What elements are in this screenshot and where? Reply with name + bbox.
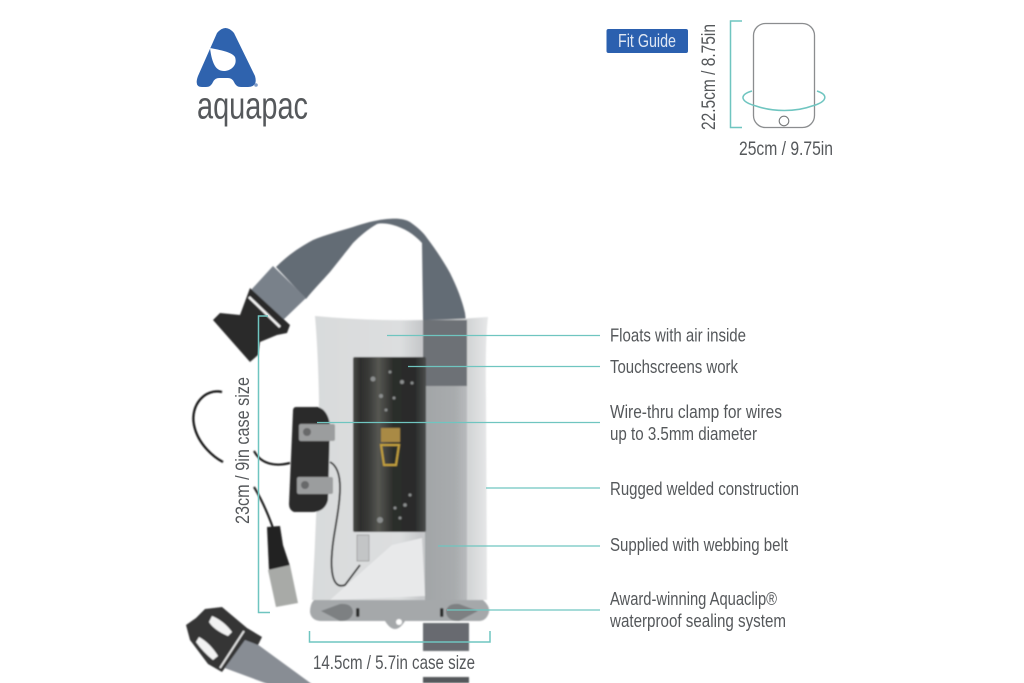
case height bracket [258,316,270,612]
icon: aquapac A mark [197,28,258,87]
device [353,357,426,532]
label: Aquaclip [609,589,786,631]
label: wire-thru clamp [610,402,782,444]
XLR plug [267,526,298,607]
height bracket [730,21,742,128]
feature labels [609,326,799,631]
bottom clip: Aquaclip [310,600,489,629]
belt top [276,219,467,330]
height label: 22.5cm / 8.75in [699,24,720,130]
top buckle [213,288,290,362]
phone outline [754,24,814,128]
wire-thru clamp [289,407,335,512]
bottom buckle and belt [186,607,320,683]
water droplets [370,370,414,523]
case height label: 23cm / 9in case size [232,377,254,524]
label: Aquaclip: waterproof sealing system [609,611,786,631]
logo: aquapac [197,28,308,128]
device connector [357,535,369,561]
device label [381,428,400,465]
label: Aquaclip: Award-winning Aquaclip® [610,589,777,609]
label: floats: Floats with air inside [610,326,746,346]
case width label: 14.5cm / 5.7in case size [313,652,475,674]
wordmark: aquapac [197,86,308,128]
width label: 25cm / 9.75in [739,139,833,160]
fit guide badge: Fit Guide [618,31,676,51]
pouch body [312,316,488,600]
pouch glare [330,538,425,600]
label: welded construction: Rugged welded construction [610,479,799,499]
belt inside pouch [423,320,467,386]
product photo: pouch with belt [186,219,489,683]
wrap ellipse [743,91,825,110]
cables [193,391,223,462]
case width bracket [310,631,490,642]
fit guide badge [606,29,688,53]
label: wire-thru clamp: Wire-thru clamp for wires [610,402,782,422]
label: touchscreens: Touchscreens work [610,357,739,377]
phone fit diagram [699,21,833,160]
label: wire-thru clamp: up to 3.5mm diameter [610,424,757,444]
belt adjuster [251,266,306,323]
callout lines [317,336,600,610]
belt below clip [423,623,469,651]
label: webbing belt: Supplied with webbing belt [610,535,788,555]
